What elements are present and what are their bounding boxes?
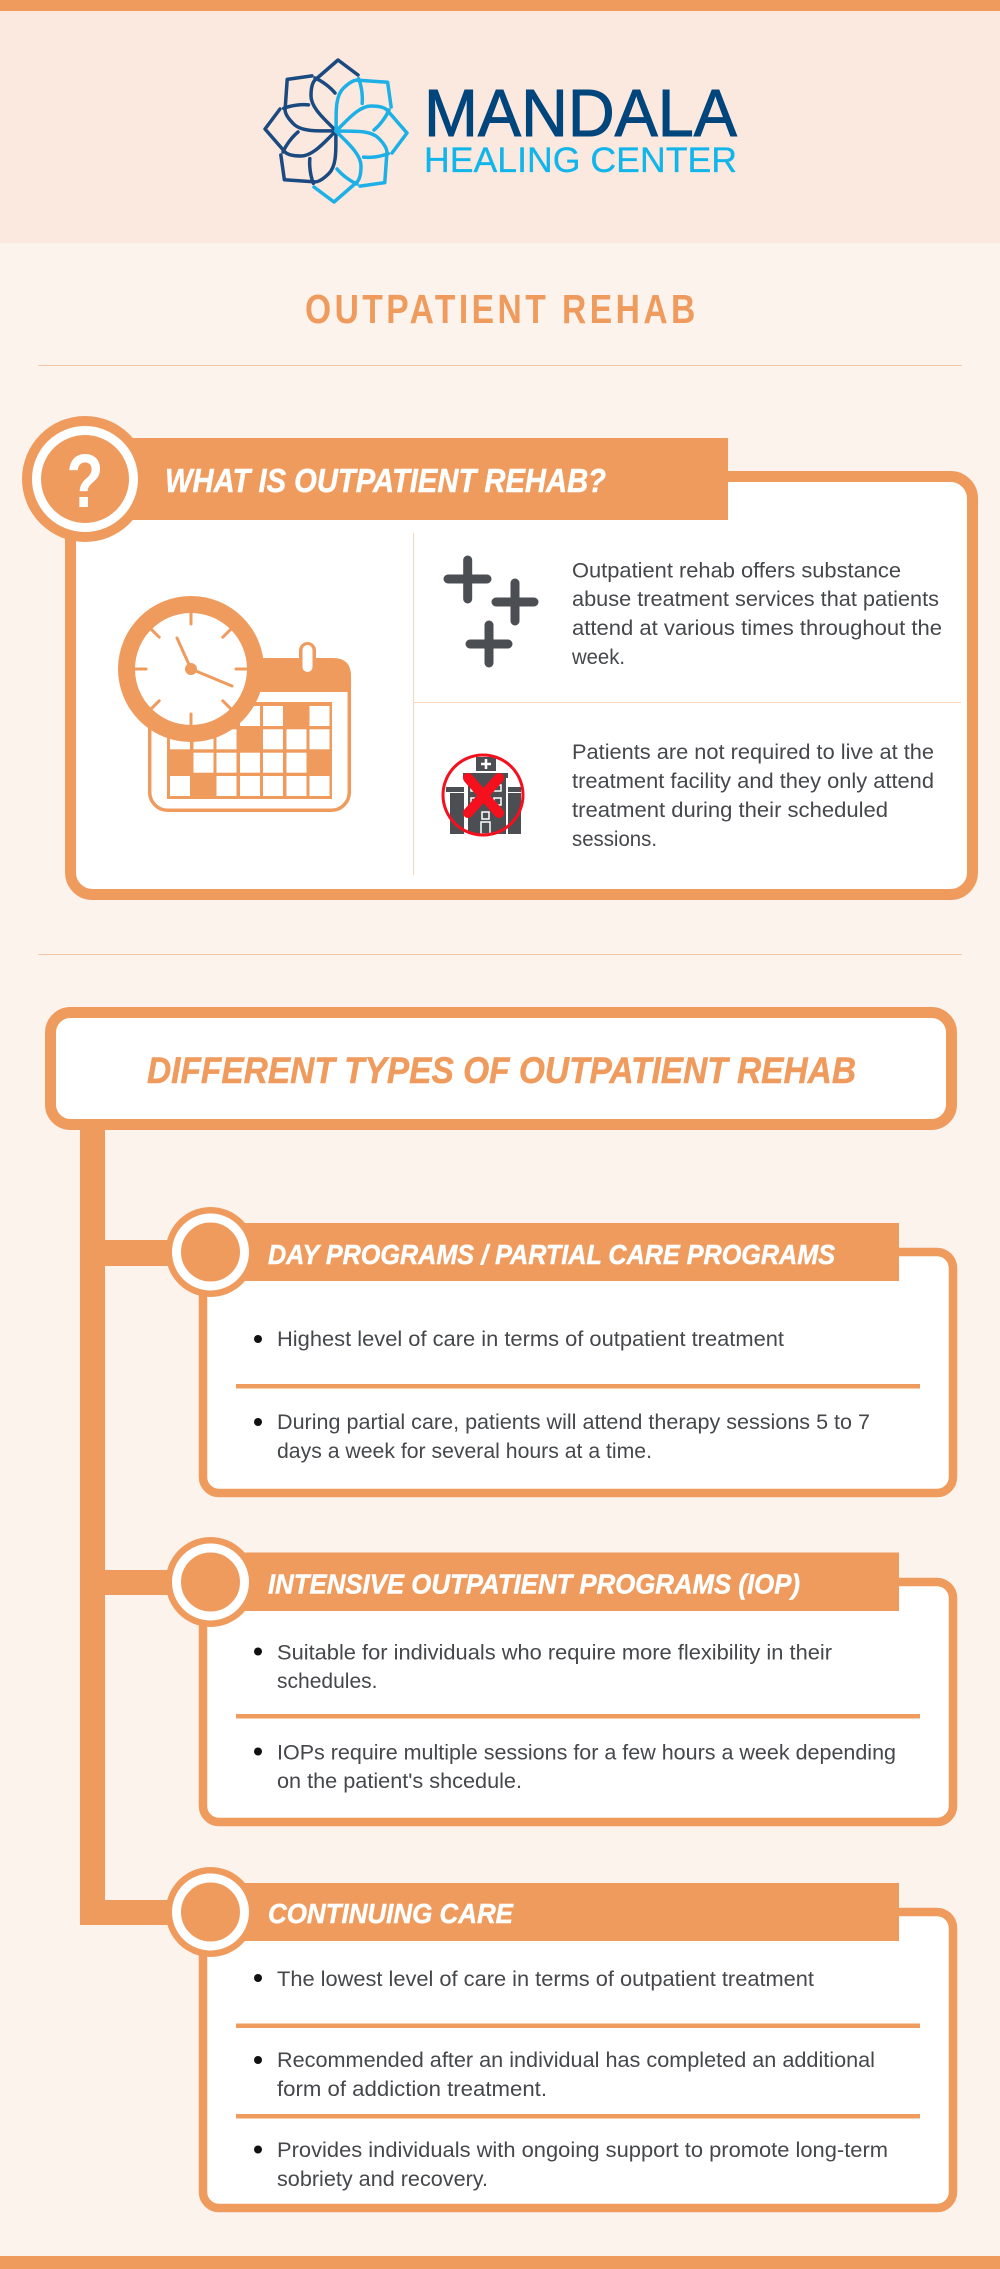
banner: day programs: DAY PROGRAMS / PARTIAL CARE PROGRAMS (268, 1239, 835, 1270)
bullet: ongoing support: sobriety and recovery. (277, 2168, 488, 2191)
icon: question mark (22, 416, 148, 542)
bullet: partial care sessions: During partial care, patients will attend therapy sessions 5 to 7 (277, 1411, 870, 1434)
section heading: different types: DIFFERENT TYPES OF OUTPATIENT REHAB (147, 1049, 856, 1091)
panel: day programs (166, 1207, 953, 1493)
section heading: different types (50, 1012, 952, 1124)
banner: continuing care: CONTINUING CARE (268, 1898, 514, 1929)
logo: Mandala Healing Center (265, 60, 737, 202)
text block: services: abuse treatment services that patients (572, 588, 939, 611)
text block: services: Outpatient rehab offers substance (572, 560, 901, 582)
bullet: lowest level: The lowest level of care in terms of outpatient treatment (277, 1968, 814, 1991)
text block: services: attend at various times throughout the (572, 617, 942, 640)
heading banner: WHAT IS OUTPATIENT REHAB? (165, 462, 606, 499)
bullet: flexibility: Suitable for individuals who require more flexibility in their (277, 1642, 832, 1664)
banner: IOP: INTENSIVE OUTPATIENT PROGRAMS (IOP) (268, 1568, 800, 1600)
banner: day programs (215, 1223, 899, 1281)
bullet: highest level: Highest level of care in terms of outpatient treatment (277, 1328, 784, 1351)
marker circle (166, 1207, 256, 1297)
bullet: ongoing support: Provides individuals with ongoing support to promote long-term (277, 2139, 888, 2162)
panel: continuing care (166, 1867, 953, 2208)
bullet: partial care sessions (254, 1411, 870, 1463)
text block: services: week. (571, 646, 625, 669)
banner: IOP (215, 1552, 899, 1611)
text block: scheduling: treatment facility and they only attend (572, 770, 934, 793)
bullet: recommended after treatment: Recommended after an individual has completed an additional (277, 2049, 875, 2072)
text block: scheduling: treatment during their scheduled (572, 799, 888, 822)
title: OUTPATIENT REHAB (305, 286, 695, 332)
icon: hospital crossed out (443, 755, 523, 835)
bullet: multiple sessions (254, 1742, 896, 1793)
logo tagline: HEALING CENTER (424, 140, 737, 180)
icon: clock and calendar (118, 596, 351, 810)
bullet: ongoing support (254, 2139, 888, 2191)
bullet: recommended after treatment (254, 2049, 875, 2101)
logo wordmark: MANDALA (424, 76, 737, 151)
header band (0, 0, 1000, 243)
bullet: flexibility: schedules. (277, 1670, 378, 1693)
marker circle (166, 1537, 256, 1627)
text block: scheduling: sessions. (572, 828, 657, 851)
heading banner (85, 438, 728, 520)
bullet: flexibility (254, 1642, 832, 1693)
panel: what is outpatient rehab (22, 416, 972, 894)
banner: continuing care (215, 1883, 899, 1941)
marker circle (166, 1867, 256, 1957)
icon: plus signs (448, 560, 534, 663)
text block: scheduling (572, 741, 934, 851)
bullet: partial care sessions: days a week for several hours at a time. (277, 1440, 652, 1463)
text block: scheduling: Patients are not required to live at the (572, 741, 934, 764)
bullet: multiple sessions: IOPs require multiple sessions for a few hours a week depending (277, 1742, 896, 1764)
icon: mandala flower (265, 60, 407, 202)
bullet: recommended after treatment: form of addiction treatment. (277, 2078, 547, 2101)
icon: question mark: ? (66, 439, 104, 524)
panel: intensive outpatient programs (166, 1537, 953, 1822)
text block: services (571, 560, 942, 669)
timeline connector (80, 1125, 175, 1925)
bullet: multiple sessions: on the patient's shcedule. (277, 1770, 522, 1793)
